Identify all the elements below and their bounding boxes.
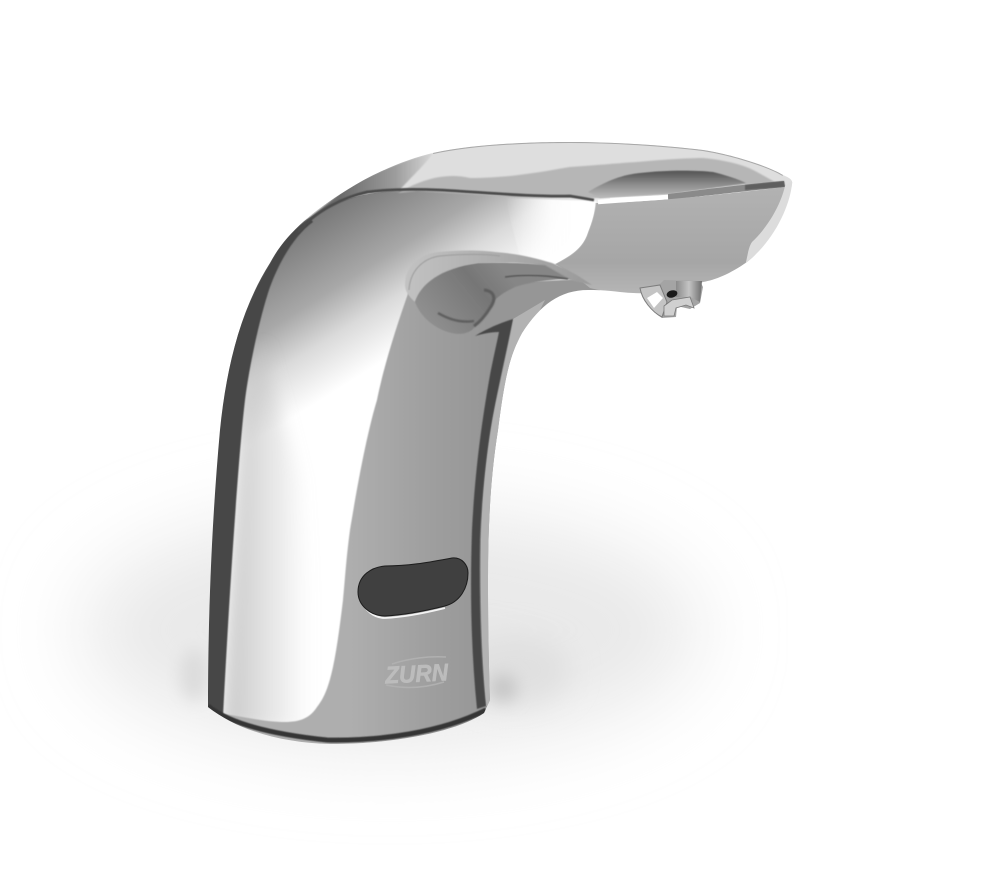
head right light edge: [746, 186, 792, 262]
lip contour: [409, 254, 500, 290]
brand logo: ZURN: [384, 659, 449, 690]
nozzle dome: [676, 281, 702, 302]
dark rim line: [307, 187, 595, 220]
left soft tone next to stripe: [223, 378, 297, 722]
rim highlight: [598, 197, 668, 202]
faucet body: [190, 135, 800, 760]
right outer band: [481, 300, 545, 706]
cast shadow: [80, 510, 700, 750]
recess fold lines: [438, 275, 568, 326]
neck and highlight zone: [222, 170, 610, 722]
head front face: [555, 187, 785, 295]
illustration: chrome sensor faucet: [82, 142, 792, 760]
sensor window: [358, 558, 468, 618]
scoop reflection: [588, 171, 746, 198]
rim band: [668, 181, 785, 200]
nozzle left hex: [640, 285, 667, 317]
neck bright highlight: [505, 198, 596, 264]
undercut lip: [405, 250, 592, 302]
nozzle outlet: [666, 289, 678, 299]
shoulder shading on top surface: [305, 154, 431, 220]
nozzle prongs: [664, 297, 694, 316]
right panel: [220, 278, 600, 750]
top outline tone: [433, 142, 783, 175]
base dark rim: [208, 706, 486, 740]
undercut recess: [415, 263, 570, 334]
top surface: [304, 142, 792, 221]
right dark stripe and fold: [471, 319, 513, 709]
lower band of top surface: [398, 158, 775, 198]
left dark stripe: [205, 218, 313, 716]
aerator nozzle: [640, 280, 703, 318]
